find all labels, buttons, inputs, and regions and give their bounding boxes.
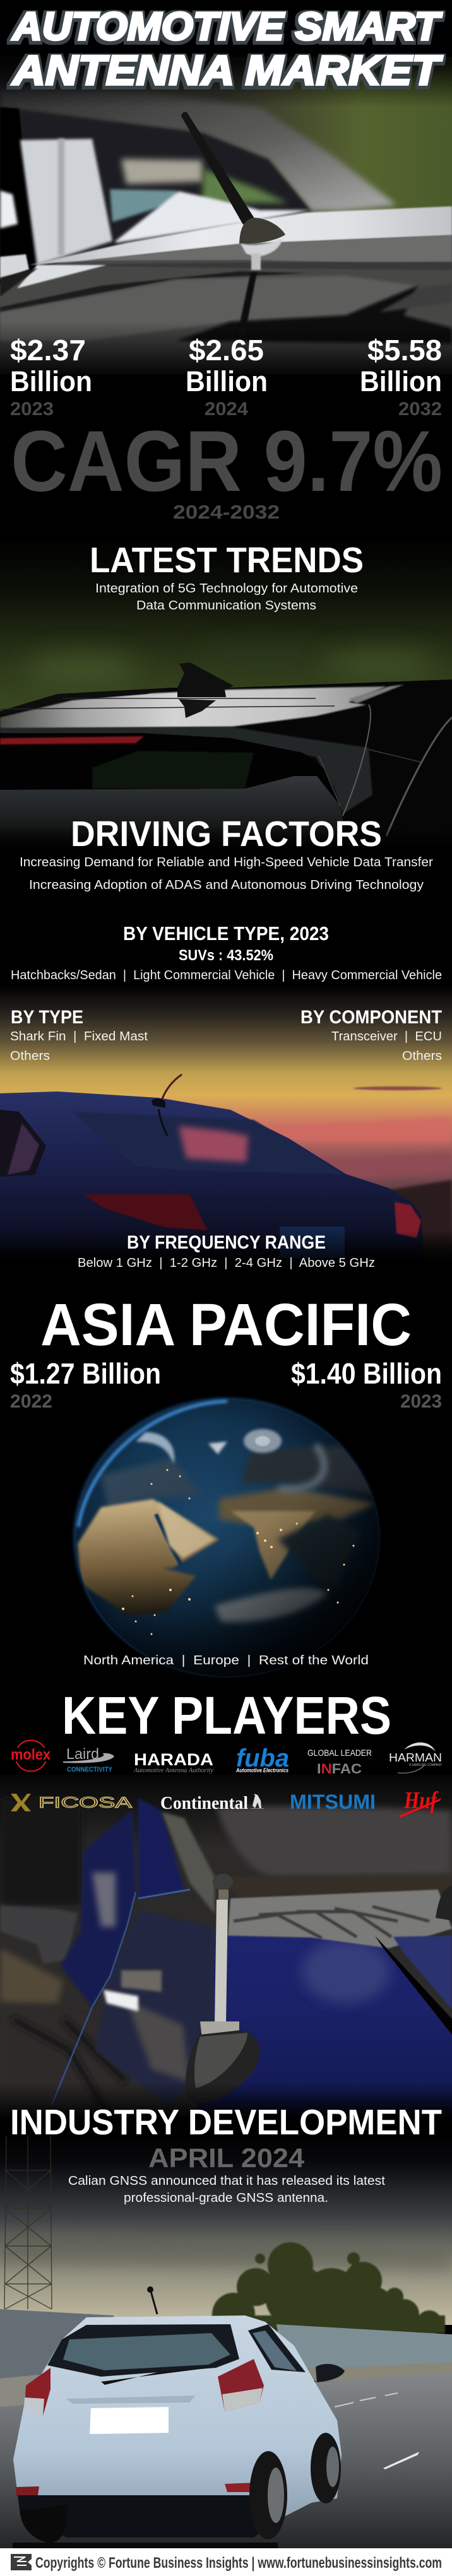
title: ANTENNA MARKET	[11, 47, 443, 93]
statistic: asia pacific 2023	[291, 1357, 442, 1412]
statistic: CAGR: 2024-2032	[173, 501, 280, 523]
logo: harman: A SAMSUNG COMPANY	[409, 1763, 443, 1767]
panel: by frequency range: Below 1 GHz | 1-2 GHz | 2-4 GHz | Above 5 GHz	[78, 1256, 375, 1270]
logo: infac global leader: INFAC	[317, 1761, 362, 1777]
icon: mast antenna and rubber base	[185, 1874, 259, 2103]
photo: foliage and SUV roof with shark fin antenna	[0, 565, 452, 838]
panel: latest trends: Data Communication Systems	[136, 599, 316, 613]
statistic: 2032 market size: $5.58	[367, 334, 442, 367]
logo: harada: HARADA	[134, 1750, 213, 1769]
panel: by vehicle type	[11, 922, 442, 982]
icon: antenna mast	[181, 112, 285, 334]
statistic: 2024 market size: 2024	[205, 399, 248, 420]
logo: molex: molex	[11, 1746, 51, 1763]
panel: by vehicle type: BY VEHICLE TYPE, 2023	[123, 922, 329, 944]
logo: harman	[389, 1743, 443, 1773]
title: AUTOMOTIVE SMART	[11, 5, 443, 49]
logo: mitsumi: MITSUMI	[290, 1791, 376, 1813]
panel: key players: KEY PLAYERS	[62, 1686, 391, 1745]
photo: fixed mast antenna on blue car	[0, 1779, 452, 2115]
statistic: 2023 market size: $2.37	[10, 334, 86, 367]
statistic: 2032 market size: Billion	[360, 365, 442, 397]
logo: molex	[11, 1740, 51, 1772]
panel: industry development: Calian GNSS announced that it has released its latest	[68, 2174, 385, 2188]
photo: white hatchback on highway	[0, 2136, 452, 2548]
illustration: earth globe at night	[73, 1397, 379, 1676]
panel: driving factors: DRIVING FACTORS	[71, 814, 382, 854]
statistic: asia pacific 2022	[10, 1357, 161, 1412]
illustration: lattice tower	[4, 2136, 52, 2309]
panel: by component	[300, 1007, 442, 1063]
panel: by type	[10, 1007, 148, 1063]
statistic: 2023 market size: 2023	[10, 399, 54, 420]
panel: driving factors: Increasing Adoption of ADAS and Autonomous Driving Technology	[29, 878, 424, 892]
panel: by type: BY TYPE	[11, 1007, 83, 1028]
statistic: asia pacific 2022: $1.27 Billion	[10, 1357, 161, 1390]
panel: latest trends	[90, 540, 364, 613]
panel: by component: Transceiver | ECU	[331, 1030, 442, 1044]
statistic: 2032 market size: 2032	[398, 399, 442, 420]
text: other regions: North America | Europe | Rest of the World	[83, 1654, 369, 1667]
logo: laird connectivity: CONNECTIVITY	[67, 1766, 113, 1773]
logo: infac global leader: GLOBAL LEADER	[307, 1748, 372, 1758]
sedan body	[0, 1091, 452, 1269]
statistic: 2023 market size	[10, 334, 92, 420]
panel: driving factors	[20, 814, 433, 892]
statistic: 2023 market size: Billion	[10, 365, 92, 397]
panel: latest trends: Integration of 5G Technology for Automotive	[95, 582, 358, 596]
panel: by type: Others	[10, 1049, 50, 1063]
icon: shark fin antenna	[177, 662, 234, 718]
panel: industry development: APRIL 2024	[148, 2143, 304, 2173]
logo: fuba: Automotive Electronics	[235, 1767, 288, 1773]
panel: by vehicle type: SUVs : 43.52%	[179, 947, 273, 964]
statistic: asia pacific 2023: 2023	[400, 1391, 442, 1412]
panel: key players	[11, 1686, 443, 1818]
panel: industry development	[10, 2102, 442, 2205]
logo: laird connectivity: Laird	[66, 1746, 99, 1763]
panel: latest trends: LATEST TRENDS	[90, 540, 364, 580]
panel: by frequency range	[78, 1232, 375, 1270]
illustration: trees	[211, 2242, 445, 2336]
statistic: 2024 market size: Billion	[186, 365, 268, 397]
title	[11, 5, 443, 93]
statistic: asia pacific 2022: 2022	[10, 1391, 52, 1412]
logo: harada: Automotive Antenna Authority	[133, 1767, 213, 1774]
logo: huf: Huf	[403, 1787, 439, 1814]
panel: industry development: professional-grade GNSS antenna.	[124, 2191, 328, 2205]
logo: harman: HARMAN	[389, 1751, 442, 1764]
panel: driving factors: Increasing Demand for Reliable and High-Speed Vehicle Data Transfer	[20, 856, 433, 869]
panel: by component: Others	[402, 1049, 442, 1063]
logo: ficosa	[11, 1794, 132, 1811]
panel: by type: Shark Fin | Fixed Mast	[10, 1030, 148, 1044]
logo: ficosa: FICOSA	[39, 1794, 132, 1811]
footer	[0, 2548, 452, 2576]
panel: by frequency range: BY FREQUENCY RANGE	[127, 1232, 326, 1253]
icon: sedan antenna	[152, 1074, 182, 1136]
hatchback car	[13, 2315, 345, 2548]
panel: by vehicle type: Hatchbacks/Sedan | Light Commercial Vehicle | Heavy Commercial Vehicle	[11, 968, 442, 982]
statistic: 2024 market size: $2.65	[189, 334, 264, 367]
logo: infac global leader	[307, 1748, 372, 1777]
logo: fuba: fuba	[236, 1744, 289, 1772]
logo: laird connectivity	[63, 1746, 114, 1773]
SUV body	[0, 679, 452, 852]
statistic: 2032 market size	[360, 334, 442, 420]
panel: by component: BY COMPONENT	[300, 1007, 442, 1028]
photo: blue sedan at sunset	[0, 985, 452, 1269]
logo: continental: Continental	[160, 1794, 248, 1813]
photo: car roof with stubby antenna	[0, 57, 452, 372]
icon: fortune business insights logo	[11, 2554, 32, 2570]
heading: asia pacific: ASIA PACIFIC	[40, 1291, 412, 1358]
icon: hatchback antenna	[147, 2286, 157, 2314]
statistic: 2024 market size	[186, 334, 268, 420]
